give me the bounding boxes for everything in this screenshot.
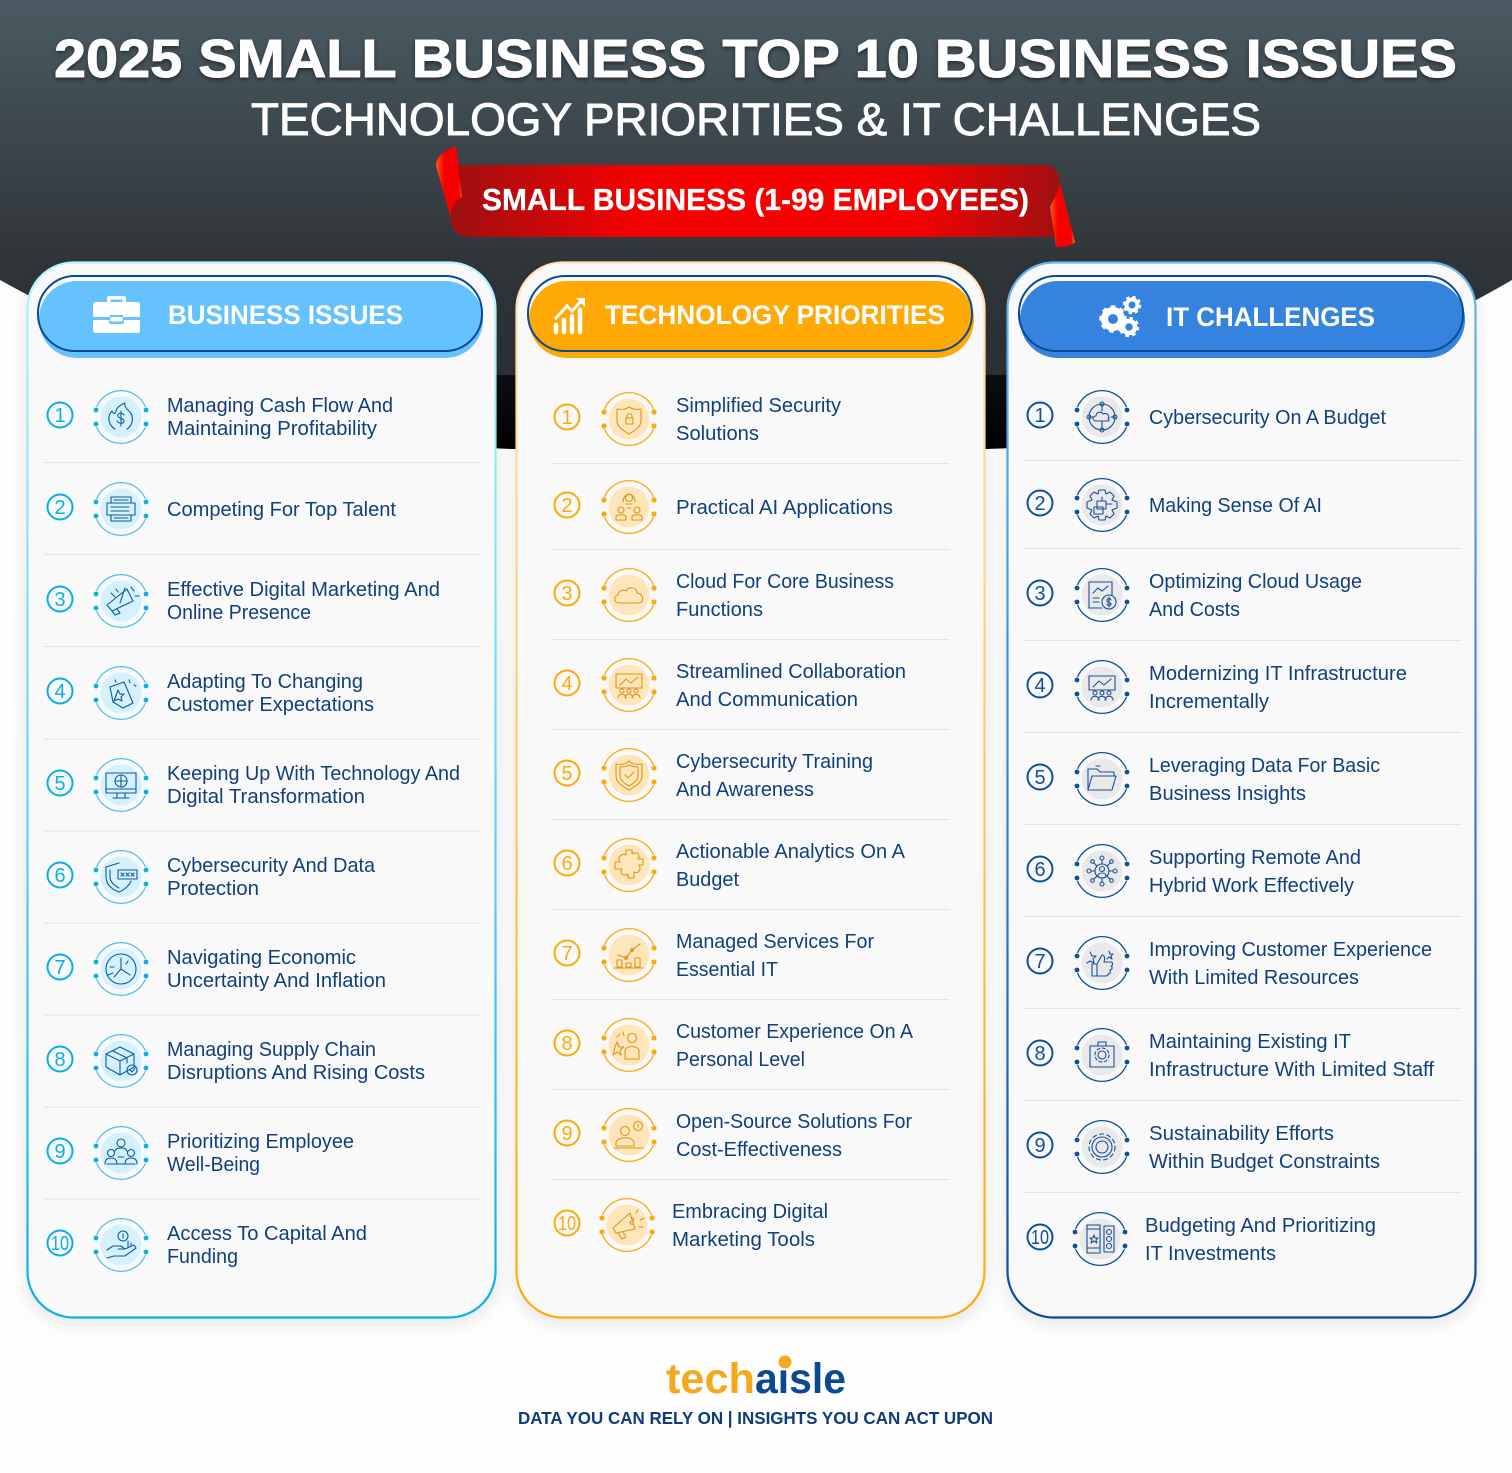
item 9: 9 [561,1123,573,1145]
item 10: Budgeting And Prioritizing [1145,1214,1376,1237]
item 2: Competing For Top Talent [167,498,396,521]
item 9: Cost-Effectiveness [676,1138,842,1161]
item 3 [554,569,894,621]
heading pill: technology priorities: TECHNOLOGY PRIORITIES [605,300,945,330]
item 5 [1028,753,1380,805]
item 1: Solutions [676,422,759,445]
red ribbon banner: SMALL BUSINESS (1-99 EMPLOYEES) [482,182,1029,217]
heading pill: IT challenges [1019,276,1465,358]
item 7: 7 [1034,951,1046,973]
item 7 [1028,937,1432,989]
item 4 [554,659,906,711]
item 8: Managing Supply Chain [167,1038,376,1061]
item 9: Sustainability Efforts [1149,1122,1334,1145]
item 9: Well-Being [167,1153,260,1176]
item 3: Functions [676,598,763,621]
item 2: 2 [561,495,573,517]
item 5: 5 [561,763,573,785]
item 2: 2 [1034,493,1046,515]
item 6: Budget [676,868,739,891]
panel card [516,262,984,1318]
heading pill: business issues [38,276,483,358]
subtitle: TECHNOLOGY PRIORITIES & IT CHALLENGES [251,94,1261,145]
item 4 [48,667,374,719]
item 8: Maintaining Existing IT [1149,1030,1351,1053]
item 10: Embracing Digital [672,1200,828,1223]
item 3: Effective Digital Marketing And [167,578,440,601]
item 6: 6 [1034,859,1046,881]
logo: techaisle: aisle [755,1355,846,1403]
item 3 [1028,569,1362,621]
item 7: 7 [561,943,573,965]
item 5 [554,749,873,801]
item 7 [48,943,386,995]
item 4: Customer Expectations [167,693,374,716]
item 7 [554,929,874,981]
item 1: Managing Cash Flow And [167,394,393,417]
item 1 [1028,391,1386,443]
item 6: Protection [167,877,259,900]
item 1: 1 [561,407,573,429]
heading pill: business issues: BUSINESS ISSUES [168,300,403,330]
dividers [551,464,950,1180]
heading pill: IT challenges: IT CHALLENGES [1166,302,1375,332]
item 5: 5 [54,773,66,795]
item 5: 5 [1034,767,1046,789]
item 4 [1028,661,1407,713]
item 5: Leveraging Data For Basic [1149,754,1380,777]
item 2 [48,483,396,535]
red ribbon banner [436,146,1075,247]
item 9 [554,1109,912,1161]
item 10 [554,1199,828,1251]
item 8: Infrastructure With Limited Staff [1149,1058,1434,1081]
item 6: Actionable Analytics On A [676,840,905,863]
item 7: Essential IT [676,958,778,981]
item 8: Personal Level [676,1048,805,1071]
item 6: Hybrid Work Effectively [1149,874,1355,897]
logo: techaisle [666,1355,846,1403]
item 10: IT Investments [1145,1242,1276,1265]
item 8: 8 [1034,1043,1046,1065]
item 3 [48,575,440,627]
logo: techaisle: tech [666,1355,755,1403]
item 4: Adapting To Changing [167,670,363,693]
item 8: Disruptions And Rising Costs [167,1061,425,1084]
item 2: Making Sense Of AI [1149,494,1322,517]
item 3: Cloud For Core Business [676,570,894,593]
item 8 [554,1019,913,1071]
item 5 [48,759,460,811]
item 2: Practical AI Applications [676,496,893,519]
item 1: 1 [1034,405,1046,427]
dividers [44,462,480,1199]
item 10 [48,1219,367,1271]
item 6: Supporting Remote And [1149,846,1361,869]
item 5: Keeping Up With Technology And [167,762,460,785]
item 5: Cybersecurity Training [676,750,873,773]
item 10: 10 [1031,1227,1049,1249]
item 9: 9 [54,1141,66,1163]
item 6: 6 [561,853,573,875]
panel: IT challenges [1008,262,1476,1318]
panel card [28,262,496,1318]
dark header background [0,0,1512,449]
item 4: Streamlined Collaboration [676,660,906,683]
item 8 [1028,1029,1434,1081]
dividers [1024,460,1461,1192]
item 4: Incrementally [1149,690,1270,713]
item 6 [1028,845,1361,897]
tagline: DATA YOU CAN RELY ON | INSIGHTS YOU CAN ACT UPON [518,1408,993,1428]
item 5: And Awareness [676,778,814,801]
item 2 [1028,479,1322,531]
item 7: Navigating Economic [167,946,356,969]
item 1: Maintaining Profitability [167,417,378,440]
item 2 [554,481,893,533]
item 9: Within Budget Constraints [1149,1150,1380,1173]
item 6: 6 [54,865,66,887]
item 1 [48,391,393,443]
item 3: 3 [561,583,573,605]
item 6 [554,839,905,891]
item 8: 8 [54,1049,66,1071]
item 7: With Limited Resources [1149,966,1359,989]
item 4: And Communication [676,688,858,711]
item 6 [48,851,376,903]
item 2: 2 [54,497,66,519]
item 3: Online Presence [167,601,311,624]
item 10: 10 [51,1233,69,1255]
item 9: Open-Source Solutions For [676,1110,912,1133]
item 7: 7 [54,957,66,979]
item 8 [48,1035,425,1087]
item 3: 3 [1034,583,1046,605]
item 1 [554,393,842,445]
item 1: Cybersecurity On A Budget [1149,406,1386,429]
item 4: Modernizing IT Infrastructure [1149,662,1407,685]
item 7: Improving Customer Experience [1149,938,1432,961]
panel: business issues [28,262,496,1318]
item 9: 9 [1034,1135,1046,1157]
item 1: Simplified Security [676,394,842,417]
item 10: 10 [558,1213,576,1235]
item 4: 4 [561,673,573,695]
item 4: 4 [1034,675,1046,697]
item 7: Uncertainty And Inflation [167,969,386,992]
item 1: 1 [54,405,66,427]
item 6: Cybersecurity And Data [167,854,376,877]
item 3: Optimizing Cloud Usage [1149,570,1362,593]
item 10 [1028,1213,1376,1265]
item 7: Managed Services For [676,930,874,953]
panel: technology priorities [516,262,984,1318]
item 3: 3 [54,589,66,611]
item 9 [48,1127,354,1179]
item 8: 8 [561,1033,573,1055]
item 10: Funding [167,1245,238,1268]
item 10: Marketing Tools [672,1228,815,1251]
item 5: Digital Transformation [167,785,365,808]
item 9: Prioritizing Employee [167,1130,354,1153]
item 10: Access To Capital And [167,1222,367,1245]
panel card [1008,262,1476,1318]
heading pill: technology priorities [528,276,974,358]
item 4: 4 [54,681,66,703]
item 9 [1028,1121,1380,1173]
item 8: Customer Experience On A [676,1020,913,1043]
title: 2025 SMALL BUSINESS TOP 10 BUSINESS ISSUES [54,29,1457,89]
item 3: And Costs [1149,598,1240,621]
item 5: Business Insights [1149,782,1306,805]
